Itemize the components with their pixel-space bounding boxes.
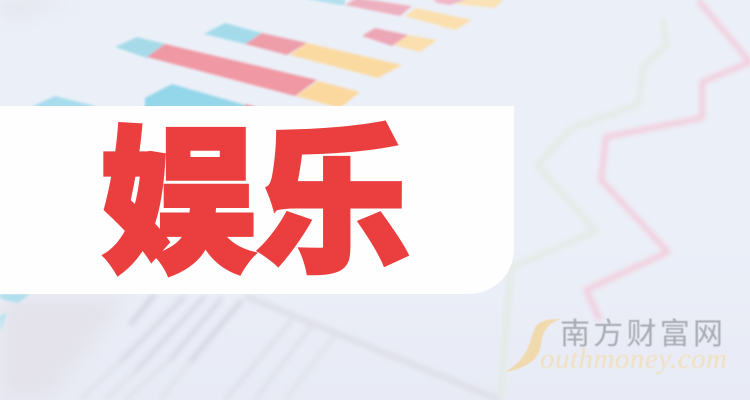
bar row: left edge (0, 294, 30, 332)
bar row: long red (115, 37, 360, 108)
blurred document text lines (80, 294, 500, 400)
blurred green line (500, 18, 667, 400)
white banner panel (0, 106, 514, 294)
icon: crescent (505, 319, 562, 372)
watermark url: outhmoney.com (540, 343, 727, 375)
soft grey shading (0, 0, 130, 400)
watermark chinese name: 南方财富网 (560, 318, 723, 351)
bar row: short (362, 28, 437, 52)
bar row: top (300, 0, 472, 30)
watermark logo (505, 318, 727, 375)
blurred pink line (586, 0, 750, 320)
bar row: lower (33, 84, 260, 110)
bar row: top right (432, 0, 505, 8)
heading: 娱乐 (100, 114, 411, 293)
bar row: long orange (204, 23, 402, 78)
blurred stacked bar chart (0, 0, 505, 332)
